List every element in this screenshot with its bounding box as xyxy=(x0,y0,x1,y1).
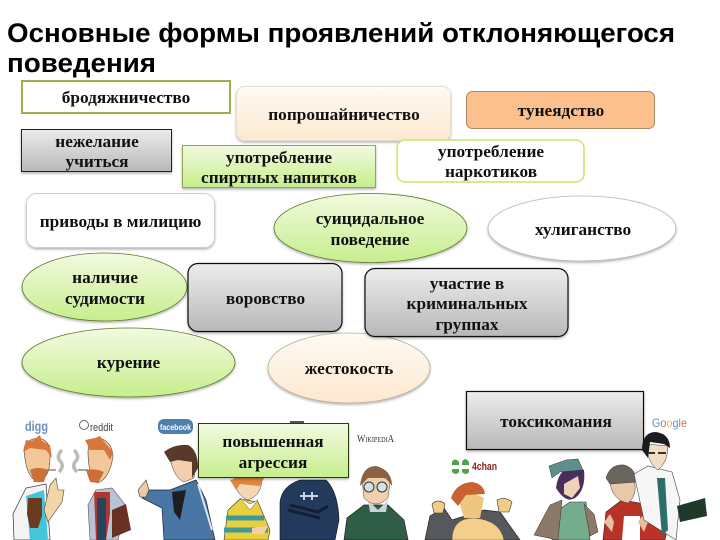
воровство box xyxy=(188,264,342,332)
употребление спиртных напитков box: употребление xyxy=(226,148,332,167)
суицидальное поведение ellipse: суицидальное xyxy=(316,209,425,228)
употребление наркотиков box: наркотиков xyxy=(445,162,537,181)
character: digg xyxy=(13,418,64,540)
попрошайничество box: попрошайничество xyxy=(268,105,420,124)
title xyxy=(7,18,675,78)
character: facebook xyxy=(138,419,215,540)
character: reddit: reddit xyxy=(90,422,113,434)
употребление наркотиков box: употребление xyxy=(438,142,544,161)
приводы в милицию box xyxy=(26,194,214,248)
повышенная агрессия box: агрессия xyxy=(239,453,307,472)
участие в криминальных группах box: группах xyxy=(435,315,499,334)
участие в криминальных группах box: криминальных xyxy=(407,294,528,313)
нежелание учиться box: учиться xyxy=(66,152,128,171)
курение ellipse xyxy=(22,328,235,397)
наличие судимости ellipse: судимости xyxy=(65,289,145,308)
токсикомания box: токсикомания xyxy=(500,412,612,431)
наличие судимости ellipse: наличие xyxy=(72,268,138,287)
тунеядство box: тунеядство xyxy=(518,101,604,120)
жестокость ellipse xyxy=(268,333,430,403)
нежелание учиться box xyxy=(22,130,172,172)
участие в криминальных группах box: участие в xyxy=(430,274,504,293)
character: 4chan xyxy=(425,459,520,540)
воровство box: воровство xyxy=(226,289,305,308)
повышенная агрессия box xyxy=(198,424,348,478)
приводы в милицию box: приводы в милицию xyxy=(40,212,201,231)
бродяжничество box xyxy=(22,81,230,113)
курение ellipse: курение xyxy=(97,353,160,372)
жестокость ellipse: жестокость xyxy=(305,359,393,378)
употребление спиртных напитков box xyxy=(182,146,376,188)
нежелание учиться box: нежелание xyxy=(55,132,139,151)
тунеядство box xyxy=(466,92,654,128)
character: beanie xyxy=(603,465,667,540)
character: striped shirt kid xyxy=(224,478,270,540)
character: 4chan: 4chan xyxy=(472,461,497,473)
участие в криминальных группах box xyxy=(365,268,568,336)
попрошайничество box xyxy=(236,86,450,140)
character: cap girl xyxy=(534,459,598,540)
суицидальное поведение ellipse xyxy=(274,194,467,262)
хулиганство ellipse: хулиганство xyxy=(535,220,631,239)
бродяжничество box: бродяжничество xyxy=(62,88,190,107)
character: Google xyxy=(634,416,707,540)
title: Основные формы проявлений отклоняющегося xyxy=(7,18,675,48)
character: glasses (Wikipedia) xyxy=(344,434,408,540)
наличие судимости ellipse xyxy=(22,253,187,321)
употребление спиртных напитков box: спиртных напитков xyxy=(201,168,357,187)
character: digg: digg xyxy=(25,418,48,434)
повышенная агрессия box: повышенная xyxy=(222,432,324,451)
character: facebook: facebook xyxy=(160,423,191,432)
character: navy hoodie xyxy=(280,421,339,540)
токсикомания box xyxy=(466,392,644,450)
character: glasses (Wikipedia): WikipediA xyxy=(357,434,395,445)
character: reddit xyxy=(74,420,131,540)
character: Google: Google xyxy=(652,416,687,430)
употребление наркотиков box xyxy=(397,140,584,182)
title: поведения xyxy=(7,48,156,78)
суицидальное поведение ellipse: поведение xyxy=(331,230,410,249)
хулиганство ellipse xyxy=(488,196,676,261)
